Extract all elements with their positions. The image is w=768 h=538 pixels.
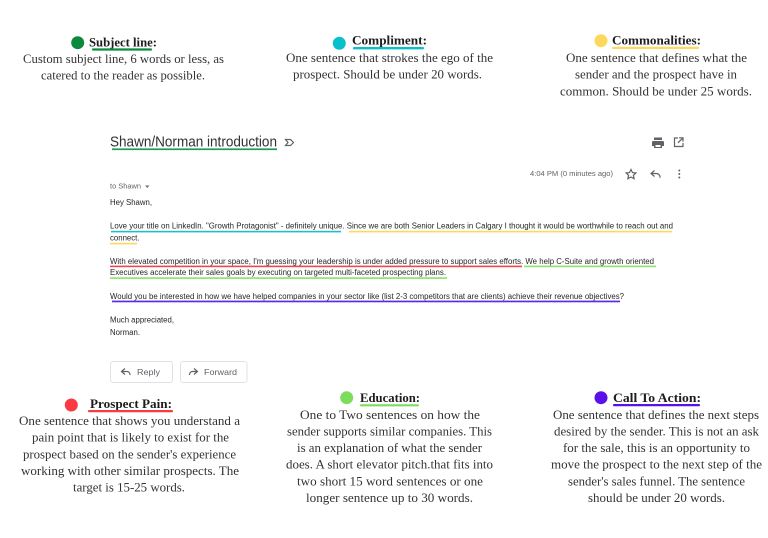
button: forward: Forward <box>204 367 237 377</box>
email paragraph: compliment and commonalities <box>110 222 673 244</box>
email paragraph: compliment and commonalities: Love your title on LinkedIn. "Growth Protagonist" - definitely unique. Since we are both Senior Leaders in Calgary I thought it would be worthwhile to reach out and <box>110 222 673 231</box>
sign-off <box>110 316 174 337</box>
text: call to action description <box>551 408 763 505</box>
panel: commonalities <box>560 32 752 98</box>
text: subject line description <box>23 52 224 82</box>
heading: call to action: Call To Action: <box>613 390 701 405</box>
icon: open in new window <box>674 138 683 146</box>
text: education description: two short 15 word sentences or one <box>297 474 484 488</box>
text: compliment description: One sentence that strokes the ego of the <box>286 51 494 65</box>
heading: subject line: Subject line: <box>89 34 157 50</box>
icon: yellow dot <box>594 34 608 47</box>
heading: commonalities: Commonalities: <box>612 32 701 48</box>
text: education description: does. A short elevator pitch.that fits into <box>286 458 493 472</box>
text: education description: One to Two sentences on how the <box>300 408 481 422</box>
icon: important marker <box>286 140 294 146</box>
greeting: Hey Shawn, <box>110 198 152 207</box>
text: education description: sender supports similar companies. This <box>287 424 492 438</box>
email paragraph: pain and education: With elevated competition in your space, I'm guessing your leadership is under added pressure to support sales efforts. We help C-Suite and growth oriented <box>110 257 654 266</box>
text: prospect pain description: pain point that is likely to exist for the <box>32 430 230 444</box>
text: call to action description: sender's sales funnel. The sentence <box>568 474 745 488</box>
sign-off: Norman. <box>110 328 140 337</box>
panel: education <box>286 390 493 505</box>
icon: light green dot <box>340 391 353 404</box>
panel: email screenshot <box>110 135 683 382</box>
button: reply: Reply <box>137 367 161 377</box>
button: reply <box>110 362 172 382</box>
email paragraph: pain and education: Executives accelerate their sales goals by executing on targeted multi-faceted prospecting plans. <box>110 268 446 277</box>
icon: purple dot <box>594 391 608 404</box>
panel: subject line <box>23 34 224 82</box>
text: subject line description: catered to the reader as possible. <box>41 68 205 82</box>
text: compliment description <box>286 51 494 82</box>
panel: compliment <box>286 32 494 82</box>
heading: education: Education: <box>360 390 420 405</box>
text: education description: longer sentence up to 30 words. <box>306 491 473 505</box>
sign-off: Much appreciated, <box>110 316 174 325</box>
text: prospect pain description: target is 15-25 words. <box>73 480 185 494</box>
icon: red dot <box>65 398 78 412</box>
heading: compliment: Compliment: <box>352 32 427 48</box>
text: call to action description: move the prospect to the next step of the <box>551 458 763 472</box>
email paragraph: compliment and commonalities: connect. <box>110 234 140 243</box>
recipient line: to Shawn <box>110 181 141 190</box>
text: education description: is an explanation of what the sender <box>297 441 483 455</box>
text: commonalities description <box>560 51 752 98</box>
panel: prospect pain <box>19 396 241 494</box>
icon: print <box>652 138 664 148</box>
text: call to action description: for the sale, this is an opportunity to <box>563 441 750 455</box>
button: forward <box>180 362 247 382</box>
text: commonalities description: One sentence that defines what the <box>566 51 748 65</box>
text: subject line description: Custom subject line, 6 words or less, as <box>23 52 224 66</box>
text: commonalities description: common. Should be under 25 words. <box>560 84 752 98</box>
panel: call to action <box>551 390 763 505</box>
icon: more menu <box>678 170 680 178</box>
text: prospect pain description: prospect based on the sender's experience <box>23 448 237 462</box>
icon: star <box>626 170 636 179</box>
text: commonalities description: sender and the prospect have in <box>575 68 737 82</box>
text: prospect pain description: One sentence that shows you understand a <box>19 414 241 428</box>
text: call to action description: should be under 20 words. <box>588 491 725 505</box>
text: call to action description: desired by the sender. This is not an ask <box>554 424 760 438</box>
text: education description <box>286 408 493 505</box>
text: prospect pain description <box>19 414 241 494</box>
text: call to action description: One sentence that defines the next steps <box>553 408 759 422</box>
email paragraph: pain and education <box>110 257 656 279</box>
timestamp: 4:04 PM (0 minutes ago) <box>530 169 613 178</box>
icon: green dot <box>71 36 84 49</box>
text: compliment description: prospect. Should be under 20 words. <box>293 68 482 82</box>
text: prospect pain description: working with other similar prospects. The <box>21 464 240 478</box>
icon: teal dot <box>333 37 346 50</box>
email subject title: Shawn/Norman introduction <box>110 135 277 151</box>
heading: prospect pain: Prospect Pain: <box>90 396 172 411</box>
email paragraph: call to action: Would you be interested in how we have helped companies in your sector like (list 2-3 competitors that are clients) achieve their revenue objectives? <box>110 292 625 301</box>
icon: reply arrow <box>651 170 660 178</box>
